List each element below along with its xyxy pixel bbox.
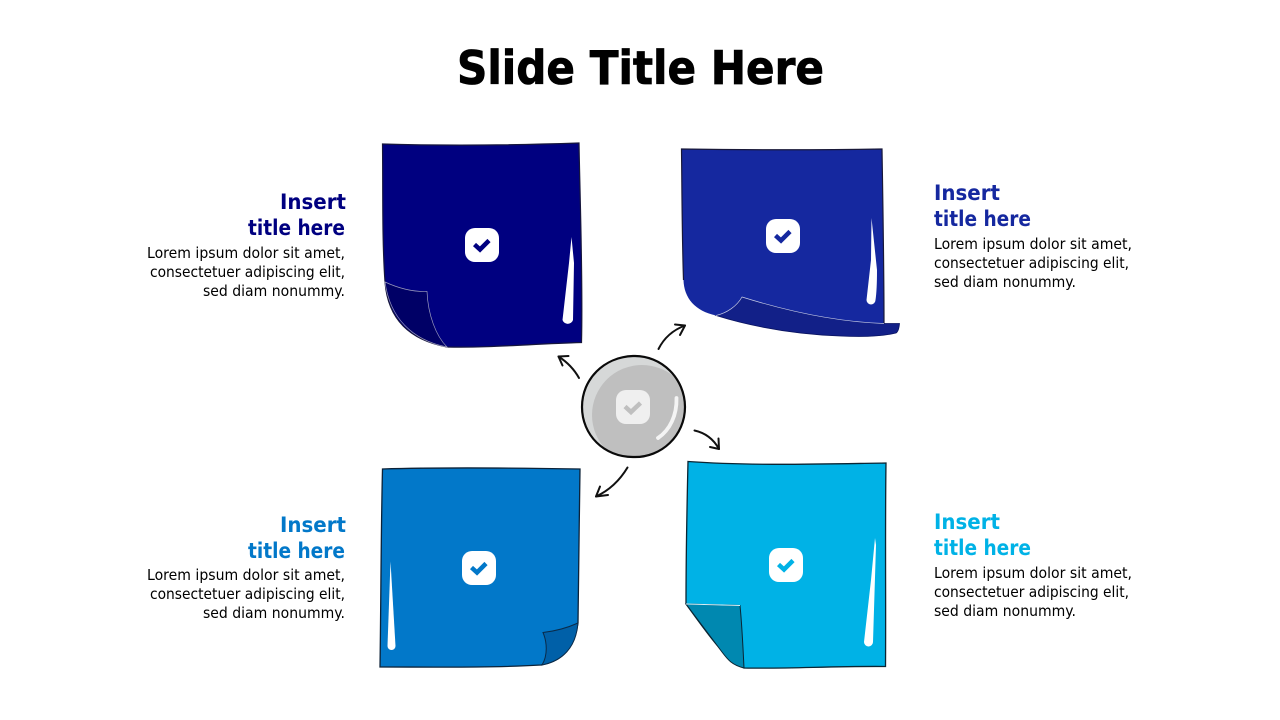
highlight xyxy=(866,218,877,304)
title: Slide Title Here xyxy=(457,41,824,95)
text block: bottom-right: Insert xyxy=(934,510,1000,534)
panel: bottom-left note xyxy=(380,468,580,667)
central circle xyxy=(582,356,692,465)
text block: top-left: title here xyxy=(248,216,345,240)
text block: top-left: Insert xyxy=(280,190,346,214)
text block: bottom-left: Insert xyxy=(280,513,346,537)
text block: bottom-left: sed diam nonummy. xyxy=(203,604,345,622)
fold edge xyxy=(716,297,884,324)
icon: check xyxy=(462,551,496,585)
arrow: to top-right xyxy=(658,324,685,349)
folded corner xyxy=(542,623,578,665)
outer disc xyxy=(582,356,685,457)
text block: bottom-right: Lorem ipsum dolor sit amet, xyxy=(934,564,1132,582)
note sheet xyxy=(382,143,582,347)
text block: top-left: Lorem ipsum dolor sit amet, xyxy=(147,244,345,262)
text block: bottom-left: title here xyxy=(248,539,345,563)
note sheet xyxy=(682,149,884,324)
icon: check xyxy=(769,548,803,582)
text block: bottom-right xyxy=(934,510,1132,620)
sheet outline xyxy=(682,149,884,324)
arrow: to bottom-right xyxy=(694,430,719,449)
text block: bottom-right: sed diam nonummy. xyxy=(934,602,1076,620)
text block: top-right: sed diam nonummy. xyxy=(934,273,1076,291)
note sheet xyxy=(380,468,580,667)
text block: top-left: consectetuer adipiscing elit, xyxy=(150,263,345,281)
text block: top-right: Insert xyxy=(934,181,1000,205)
highlight xyxy=(864,538,876,646)
text block: bottom-left xyxy=(147,513,346,622)
arrow: to bottom-left xyxy=(596,468,628,496)
circle outline xyxy=(582,356,685,457)
text block: top-left: sed diam nonummy. xyxy=(203,282,345,300)
icon: check xyxy=(766,219,800,253)
highlight xyxy=(562,237,574,324)
note sheet xyxy=(686,462,886,668)
panel: top-left note xyxy=(382,143,582,347)
text block: top-right: consectetuer adipiscing elit, xyxy=(934,254,1129,272)
text block: bottom-right: title here xyxy=(934,536,1031,560)
highlight xyxy=(658,398,677,438)
icon: check xyxy=(465,228,499,262)
text block: top-left xyxy=(147,190,346,300)
folded corner xyxy=(385,282,447,347)
text block: bottom-left: Lorem ipsum dolor sit amet, xyxy=(147,566,345,584)
text block: top-right xyxy=(934,181,1132,291)
curled flap xyxy=(716,297,900,337)
highlight xyxy=(388,562,396,650)
text block: top-right: title here xyxy=(934,207,1031,231)
text block: top-right: Lorem ipsum dolor sit amet, xyxy=(934,235,1132,253)
arrow: to top-left xyxy=(558,356,579,378)
panel: bottom-right note xyxy=(686,462,886,668)
fold edge xyxy=(686,604,740,606)
folded corner xyxy=(686,604,744,668)
text block: bottom-right: consectetuer adipiscing elit, xyxy=(934,583,1129,601)
icon: check xyxy=(616,390,650,424)
panel: top-right note xyxy=(682,149,900,337)
inner disc xyxy=(592,365,684,456)
text block: bottom-left: consectetuer adipiscing elit, xyxy=(150,585,345,603)
